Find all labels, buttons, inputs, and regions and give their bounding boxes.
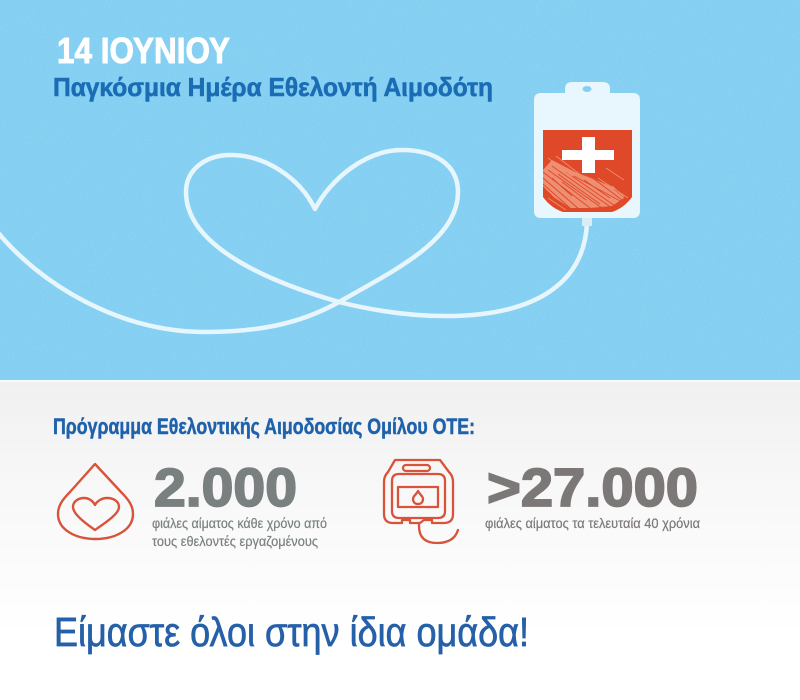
title date: 14 ΙΟΥΝΙΟΥ	[57, 30, 230, 71]
section heading: Πρόγραμμα Εθελοντικής Αιμοδοσίας Ομίλου ΟΤΕ:	[53, 414, 475, 439]
stat caption: yearly bottles: τους εθελοντές εργαζομένους	[152, 533, 318, 549]
stat: 2.000: 2.000	[154, 458, 297, 518]
stat caption: yearly bottles	[152, 515, 327, 549]
icon: drop with heart	[58, 464, 133, 539]
panel: blue hero background	[0, 0, 800, 380]
stat caption: yearly bottles: φιάλες αίματος κάθε χρόνο από	[152, 515, 327, 531]
icon: blood bag	[534, 82, 640, 226]
heart-shaped blood tube	[0, 150, 587, 332]
panel: lower grey background	[0, 380, 800, 700]
subtitle: Παγκόσμια Ημέρα Εθελοντή Αιμοδότη	[53, 72, 493, 102]
icon: outlined blood bag	[384, 460, 458, 543]
closing slogan: Είμαστε όλοι στην ίδια ομάδα!	[54, 609, 529, 655]
stat: >27.000: >27.000	[487, 458, 698, 518]
divider band	[0, 380, 800, 382]
stat caption: forty years: φιάλες αίματος τα τελευταία 40 χρόνια	[485, 515, 700, 531]
